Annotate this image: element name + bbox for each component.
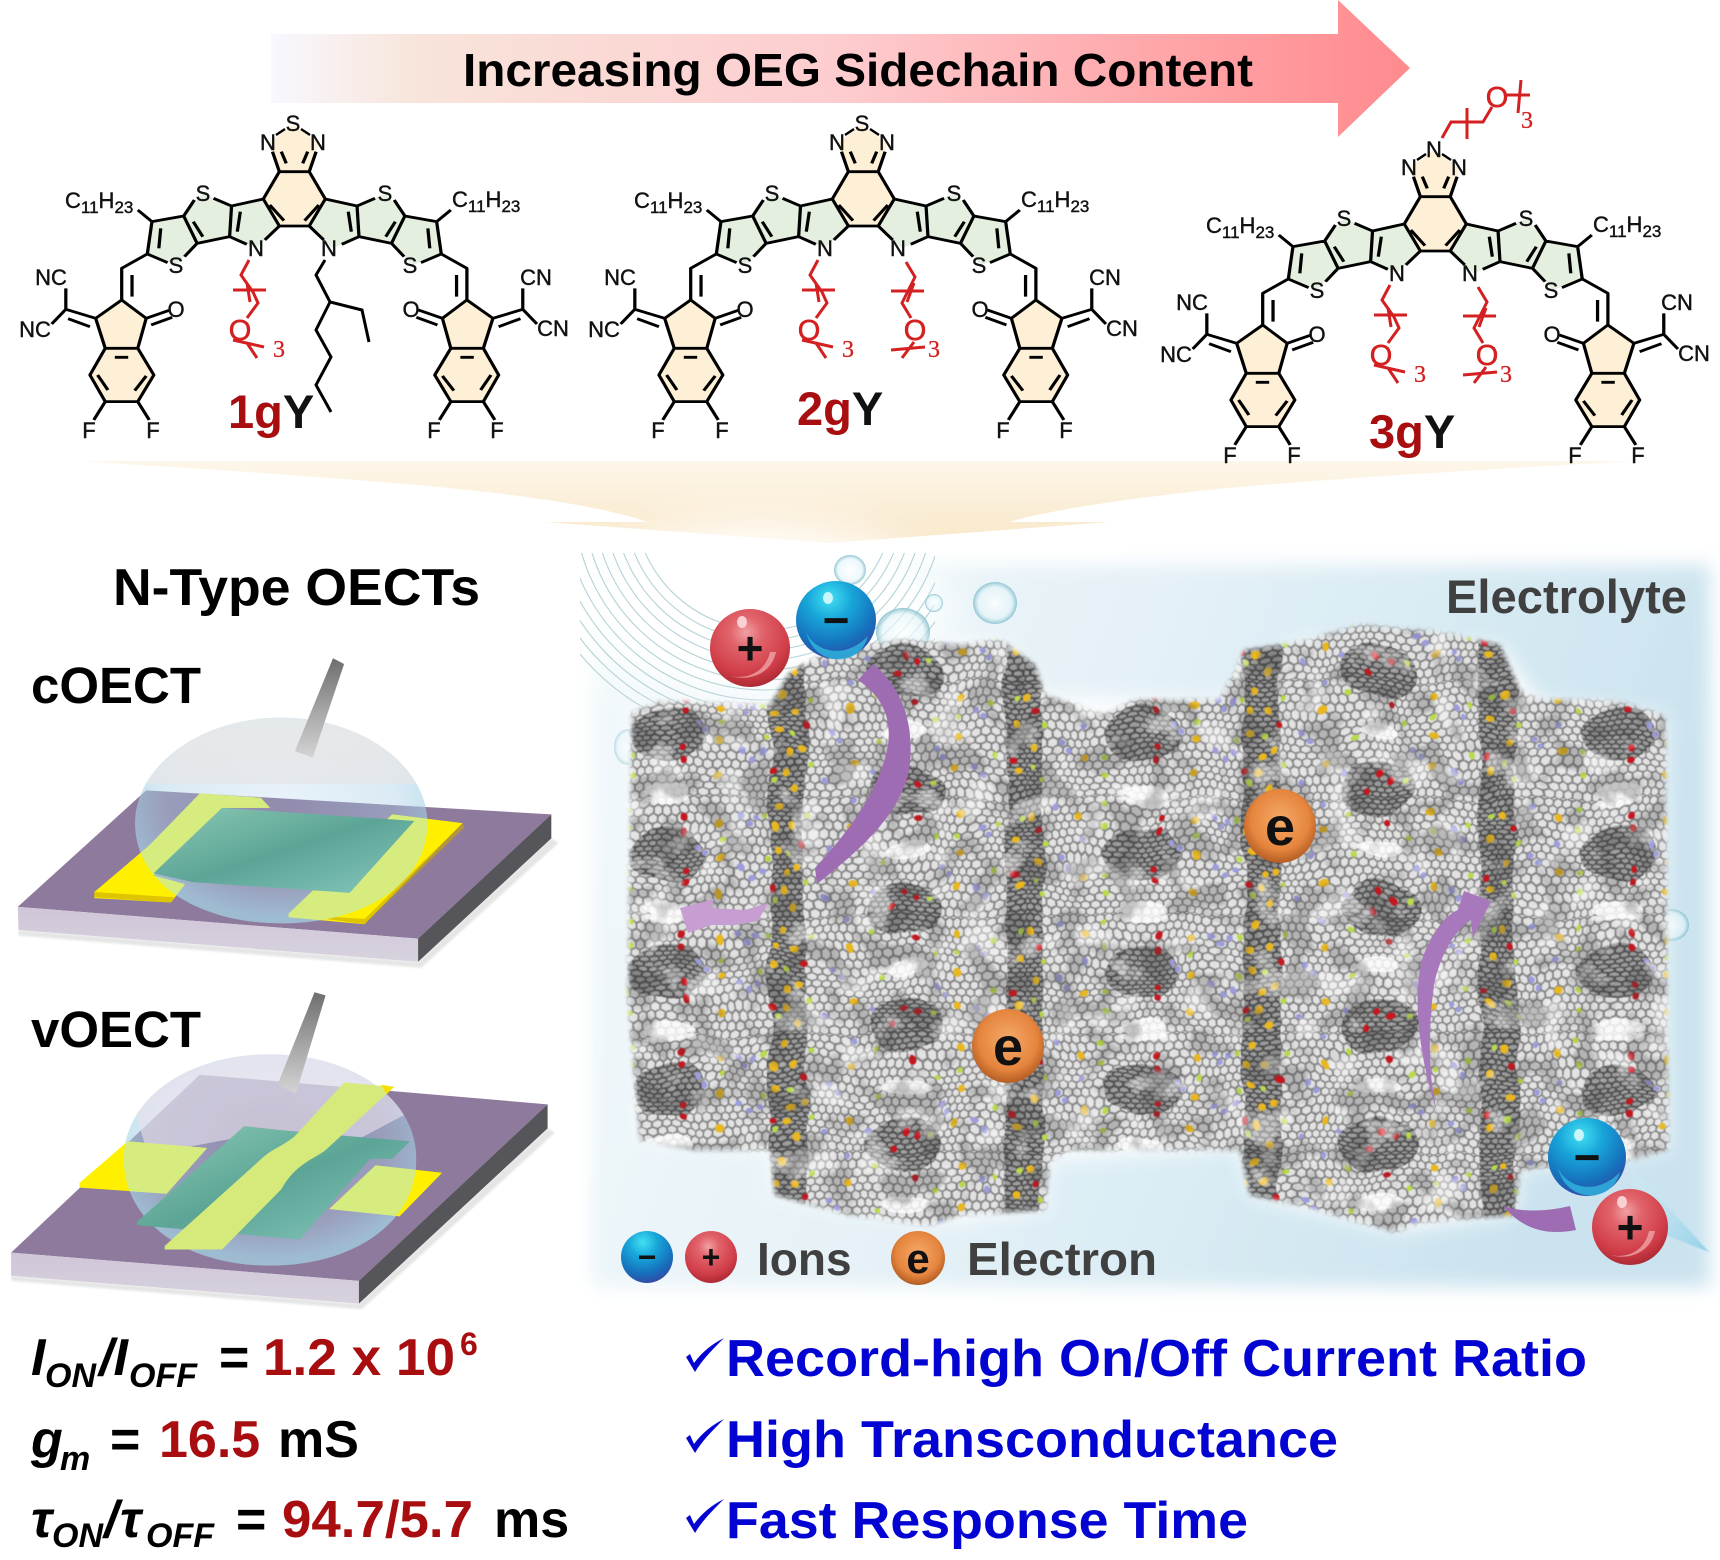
benefit: high transconductance: High Transconductance (726, 1411, 1338, 1469)
icon: cation bottom right: + (1617, 1201, 1643, 1253)
label: Electrolyte: Electrolyte (1446, 570, 1687, 623)
molecule: 3gY: S (1310, 278, 1324, 303)
molecule: 2gY: CN (1089, 265, 1121, 290)
molecule: 3gY: S (1519, 206, 1533, 231)
label: cOECT: cOECT (31, 657, 201, 714)
molecule: 3gY: S (1337, 206, 1351, 231)
red OEG chains: O (1486, 82, 1508, 114)
molecule: 1gY: CN (537, 316, 569, 341)
arrow: purple ion path, anion entering (815, 664, 911, 884)
title arrow: increasing OEG sidechain content (271, 0, 1410, 137)
icon: check (686, 1499, 724, 1533)
metric: response time (31, 1491, 569, 1555)
molecule: 2gY: S (947, 181, 961, 206)
metric: on/off ratio: = (219, 1329, 249, 1387)
molecule: 2gY: 11 (650, 198, 668, 217)
molecule: 1gY: N (310, 130, 326, 155)
red OEG chains: 3 (842, 337, 854, 363)
molecule: 1gY: S (196, 181, 210, 206)
metric: on/off ratio: 6 (460, 1326, 478, 1362)
molecule: 1gY: N (260, 130, 276, 155)
molecule: 2gY: O (971, 297, 989, 322)
molecule: 1gY: O (402, 297, 420, 322)
bubbles (614, 555, 1689, 941)
icon: anion bottom right: − (1574, 1131, 1600, 1183)
device: cOECT (18, 658, 559, 968)
red OEG chains: 3 (1521, 108, 1533, 134)
molecule: 2gY: NC (604, 265, 636, 290)
molecule: 3gY: F (1631, 443, 1645, 468)
icon: legend anion (621, 1231, 673, 1283)
metric: response time: τ (31, 1491, 55, 1549)
metric: on/off ratio (31, 1326, 478, 1395)
metric: response time: ON (52, 1517, 104, 1555)
molecule: 2gY: N (879, 130, 895, 155)
metric: transconductance: m (60, 1440, 90, 1478)
molecule: 2gY: 23 (1070, 197, 1089, 216)
molecule: 3gY: CN (1661, 290, 1693, 315)
icon: legend cation: + (702, 1239, 720, 1275)
molecule: 2gY: 23 (683, 198, 702, 217)
molecule: 3gY (1160, 80, 1710, 468)
metric: on/off ratio: I (31, 1329, 47, 1387)
icon: legend anion: − (638, 1239, 656, 1275)
molecule: 3gY: N (1389, 261, 1405, 286)
molecule: 3gY: H (1627, 212, 1642, 237)
red OEG chains: 3 (928, 337, 940, 363)
molecule: 3gY: N (1462, 261, 1478, 286)
molecule: 3gY: NC (1176, 290, 1208, 315)
molecule: 3gY: N (1401, 155, 1417, 180)
molecule: 3gY: NC (1160, 342, 1192, 367)
icon: electron lower (972, 1009, 1044, 1083)
molecule: 2gY: S (765, 181, 779, 206)
molecule: 1gY: NC (35, 265, 67, 290)
metric: response time: = (236, 1491, 266, 1549)
molecule: 2gY: F (996, 418, 1010, 443)
molecule: 1gY: S (286, 111, 300, 136)
red OEG chain (229, 260, 285, 363)
arrow: purple ion path, left (680, 899, 768, 933)
molecule: 2gY (588, 111, 1138, 443)
molecule: 1gY: NC (19, 317, 51, 342)
molecule: 1gY: C (65, 188, 81, 213)
molecule: 3gY: 23 (1255, 223, 1274, 242)
red OEG chains: 3 (1500, 362, 1512, 388)
molecule: 2gY: H (668, 188, 683, 213)
metric: on/off ratio: /I (97, 1329, 129, 1387)
metric: on/off ratio: 1.2 x 10 (263, 1329, 455, 1387)
metric: on/off ratio: ON (45, 1357, 97, 1395)
molecule: 1gY: 23 (501, 197, 520, 216)
red OEG chains (1370, 80, 1533, 388)
legend (621, 1231, 1157, 1285)
metric: transconductance: = (110, 1411, 140, 1469)
molecule: 1gY: S (169, 253, 183, 278)
molecule: 3gY: 11 (1222, 223, 1240, 242)
molecule: 1gY: H (486, 187, 501, 212)
molecule: 1gY: CN (520, 265, 552, 290)
icon: anion top: − (823, 594, 849, 646)
molecule: 2gY: H (1055, 187, 1070, 212)
red OEG chains: O (1476, 340, 1498, 372)
icon: legend cation (685, 1231, 737, 1283)
molecule: 2gY: 11 (1037, 197, 1055, 216)
arrow: purple ion path, lower right (1503, 1206, 1576, 1232)
molecule: 3gY: O (1543, 322, 1561, 347)
molecule: 1gY: S (403, 253, 417, 278)
icon: cation top: + (737, 622, 763, 674)
molecule: 2gY: NC (588, 317, 620, 342)
icon: legend electron (891, 1231, 945, 1285)
icon: electron upper: e (1265, 797, 1295, 857)
red OEG chains (798, 260, 940, 363)
label 3gY: 3gY (1369, 405, 1455, 458)
molecule: 2gY: C (1021, 187, 1037, 212)
red OEG chains: 3 (1414, 362, 1426, 388)
molecule: 1gY: F (490, 418, 504, 443)
icon: check (686, 1419, 724, 1453)
molecule: 2gY: C (634, 188, 650, 213)
molecule: 1gY: O (167, 297, 185, 322)
metric: response time: τ (120, 1491, 144, 1549)
metric: response time: 94.7/5.7 (282, 1491, 473, 1549)
metric: response time: ms (494, 1491, 569, 1549)
molecule: 1gY: 11 (81, 198, 99, 217)
icon: check (686, 1338, 724, 1372)
device: vOECT (11, 992, 555, 1309)
molecule: 2gY: F (651, 418, 665, 443)
molecule: 1gY: N (321, 236, 337, 261)
molecule: 3gY: 11 (1609, 222, 1627, 241)
panel: electrolyte background (580, 508, 1718, 1296)
molecule: 1gY: 11 (468, 197, 486, 216)
funnel arrow (82, 461, 1634, 543)
label 2gY: 2gY (797, 382, 883, 435)
molecule: 3gY: S (1544, 278, 1558, 303)
icon: electron lower: e (993, 1017, 1023, 1077)
metric: transconductance (30, 1411, 359, 1478)
molecule: 1gY: H (99, 188, 114, 213)
molecule: 3gY: O (1308, 322, 1326, 347)
red OEG chain: O (229, 315, 251, 347)
icon: anion bottom right (1548, 1118, 1626, 1196)
molecule: 2gY: S (738, 253, 752, 278)
molecule: 2gY: F (1059, 418, 1073, 443)
legend label: Ions: Ions (757, 1233, 852, 1285)
metric: on/off ratio: OFF (129, 1357, 198, 1395)
molecule: 3gY: 23 (1642, 222, 1661, 241)
molecule: 2gY: N (890, 236, 906, 261)
molecule: 1gY: F (427, 418, 441, 443)
molecule: 2gY: N (817, 236, 833, 261)
molecule: 2gY: N (829, 130, 845, 155)
icon: cation bottom right (1592, 1189, 1668, 1265)
icon: cation top (710, 609, 790, 687)
molecule: 1gY: 23 (114, 198, 133, 217)
molecule: 2gY: F (715, 418, 729, 443)
molecule: 1gY: S (378, 181, 392, 206)
heading: N-Type OECTs: N-Type OECTs (113, 559, 480, 617)
molecule: 3gY: C (1593, 212, 1609, 237)
molecule: 1gY (19, 111, 569, 443)
molecular lattice film (624, 622, 1678, 1238)
red OEG chains: O (798, 315, 820, 347)
molecule: 3gY: H (1240, 213, 1255, 238)
arrow heading: Increasing OEG Sidechain Content (463, 44, 1253, 96)
metric: transconductance: mS (278, 1411, 359, 1469)
molecule: 3gY: N (1426, 137, 1442, 162)
red OEG chains: O (904, 315, 926, 347)
icon: legend electron: e (906, 1235, 930, 1282)
legend label: Electron: Electron (967, 1233, 1157, 1285)
molecule: 1gY: N (248, 236, 264, 261)
icon: electron upper (1244, 789, 1316, 863)
label 1gY: 1gY (228, 385, 314, 438)
molecule: 3gY: C (1206, 213, 1222, 238)
benefit: record-high on/off: Record-high On/Off Current Ratio (726, 1330, 1587, 1388)
molecule: 1gY: F (82, 418, 96, 443)
molecule: 3gY: F (1287, 443, 1301, 468)
molecule: 2gY: S (855, 111, 869, 136)
molecule: 3gY: F (1568, 443, 1582, 468)
molecule: 2gY: CN (1106, 316, 1138, 341)
molecule: 2gY: S (972, 253, 986, 278)
metric: transconductance: g (30, 1411, 63, 1469)
metric: transconductance: 16.5 (159, 1411, 260, 1469)
molecule: 3gY: F (1223, 443, 1237, 468)
molecule: 1gY: F (146, 418, 160, 443)
molecule: 3gY: N (1451, 155, 1467, 180)
benefit: fast response: Fast Response Time (726, 1492, 1248, 1550)
label: vOECT: vOECT (31, 1001, 201, 1058)
molecule: 3gY: CN (1678, 341, 1710, 366)
molecule: 1gY: C (452, 187, 468, 212)
icon: anion top (796, 581, 876, 660)
red OEG chain: 3 (273, 337, 285, 363)
metric: response time: OFF (146, 1517, 215, 1555)
red OEG chains: O (1370, 340, 1392, 372)
branched alkyl chain (316, 260, 369, 412)
molecule: 2gY: O (736, 297, 754, 322)
metric: response time: / (102, 1491, 124, 1549)
arrow: purple ion path, upward (1418, 891, 1491, 1112)
